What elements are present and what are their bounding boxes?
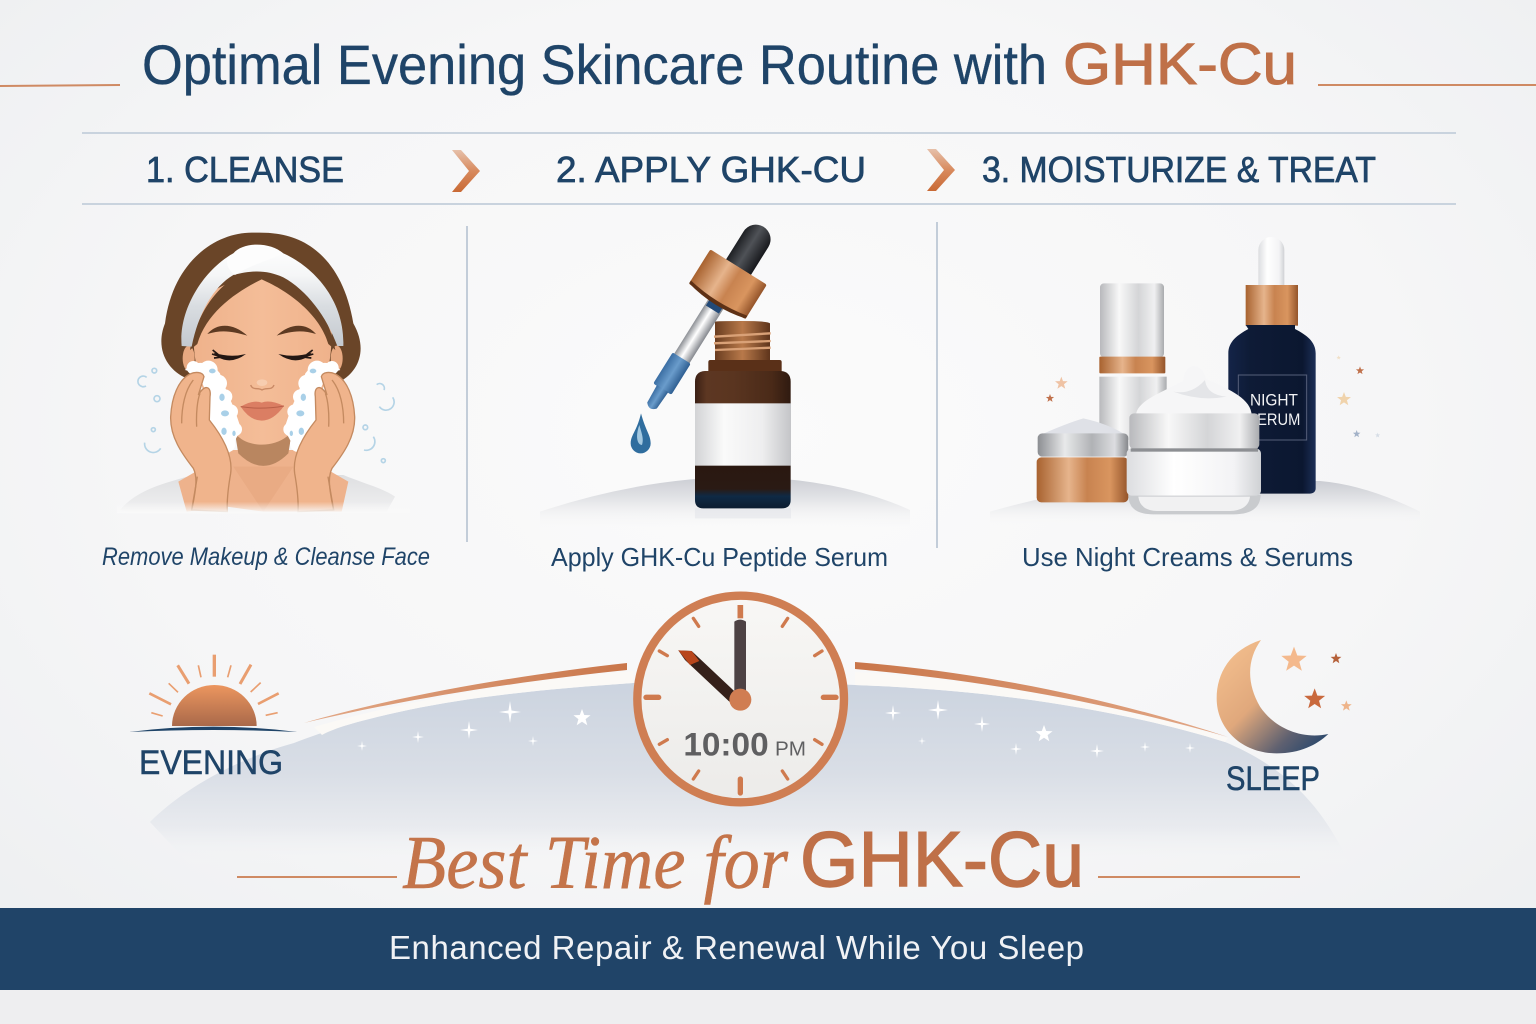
title: GHK-Cu <box>1063 32 1297 97</box>
arrow: step 1 to 2 <box>452 150 480 192</box>
banner <box>0 908 1536 990</box>
illustration: night creams and serum <box>990 237 1420 525</box>
footer strip <box>0 990 1536 1024</box>
heading: best time for GHK-Cu: Best Time for <box>402 821 788 905</box>
arc: clock to sleep <box>855 662 1228 737</box>
illustration: woman cleansing face <box>117 233 410 513</box>
large cream jar <box>1127 366 1261 514</box>
step heading: moisturize: 3. MOISTURIZE & TREAT <box>982 149 1376 190</box>
arc: evening to clock <box>304 663 627 723</box>
icon: setting sun <box>129 655 297 732</box>
navy night serum bottle <box>1228 237 1316 494</box>
banner: Enhanced Repair & Renewal While You Sleep <box>389 929 1084 966</box>
step heading: apply: 2. APPLY GHK-CU <box>556 149 866 190</box>
caption: moisturize: Use Night Creams & Serums <box>1022 542 1353 572</box>
caption: cleanse: Remove Makeup & Cleanse Face <box>102 543 430 571</box>
navy night serum bottle: NIGHT <box>1250 391 1298 410</box>
label: sleep: SLEEP <box>1226 760 1320 798</box>
small copper jar <box>1037 418 1128 502</box>
illustration: serum bottle with dropper <box>540 209 910 528</box>
label: evening: EVENING <box>139 744 283 782</box>
icon: clock at 10:00 PM: 10:00 <box>683 726 769 762</box>
title: Optimal Evening Skincare Routine with <box>142 33 1047 96</box>
arrow: step 2 to 3 <box>927 149 955 191</box>
icon: clock at 10:00 PM: PM <box>775 737 806 760</box>
icon: crescent moon and stars <box>1217 640 1352 753</box>
tall silver bottle <box>1099 283 1167 440</box>
caption: apply: Apply GHK-Cu Peptide Serum <box>551 542 888 572</box>
heading: best time for GHK-Cu <box>402 815 1084 905</box>
icon: clock at 10:00 PM <box>637 596 844 802</box>
navy night serum bottle: SERUM <box>1247 410 1300 429</box>
step heading: cleanse: 1. CLEANSE <box>146 149 344 190</box>
heading: best time for GHK-Cu: GHK-Cu <box>800 815 1084 903</box>
timeline hill with stars <box>150 671 1350 865</box>
